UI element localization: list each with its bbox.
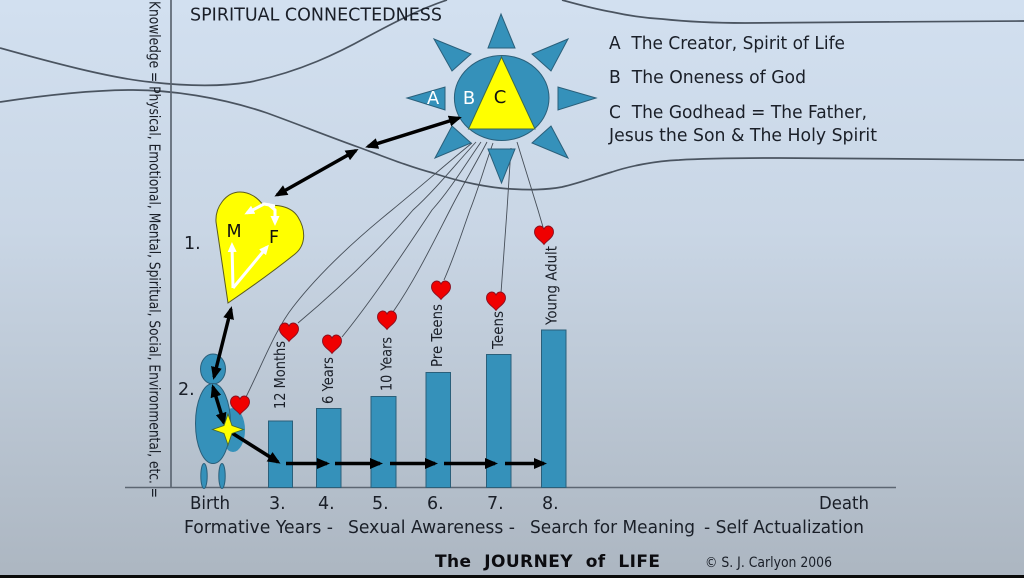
sun circle (B: oneness of god)	[454, 56, 549, 140]
bar labels: 10 Years	[378, 337, 396, 391]
timeline labels	[190, 494, 869, 514]
legend: A B C: Jesus the Son & The Holy Spirit	[608, 125, 877, 146]
icon: yellow star	[212, 414, 244, 445]
bar labels: Teens	[489, 311, 507, 350]
bar labels	[271, 246, 560, 409]
timeline labels: 6.	[427, 494, 444, 514]
sun rays (A: the creator)	[407, 14, 596, 183]
red hearts	[230, 226, 554, 414]
legend: A B C: B The Oneness of God	[609, 67, 806, 88]
bar labels: Pre Teens	[428, 304, 446, 367]
timeline labels: 5.	[372, 494, 389, 514]
yellow heart	[216, 192, 304, 303]
bar labels: 12 Months	[271, 341, 289, 409]
lines from sun to hearts	[246, 142, 543, 397]
timeline labels: 8.	[542, 494, 559, 514]
human figure	[196, 354, 245, 488]
timeline labels: 7.	[487, 494, 504, 514]
letters A B C: B	[463, 88, 475, 109]
godhead triangle (C)	[468, 57, 535, 129]
timeline labels: 3.	[269, 494, 286, 514]
bars: life stages	[268, 330, 566, 488]
bar labels: Young Adult	[542, 246, 560, 326]
title: The JOURNEY of LIFE	[435, 552, 660, 572]
black arrows	[213, 118, 544, 464]
timeline labels: Death	[819, 494, 869, 514]
life phases row: - Self Actualization	[704, 518, 864, 538]
letters A B C: C	[494, 87, 506, 108]
sun: the creator, oneness and godhead	[407, 14, 596, 183]
timeline labels: Birth	[190, 494, 230, 514]
axes	[125, 0, 896, 488]
life phases row: Search for Meaning	[530, 518, 695, 538]
number 1: 1.	[184, 234, 201, 254]
number 2: 2.	[178, 380, 195, 400]
legend: A B C: A The Creator, Spirit of Life	[609, 33, 845, 54]
copyright: © S. J. Carlyon 2006	[705, 555, 832, 571]
bar labels: 6 Years	[319, 357, 337, 404]
connectedness boundary curves	[0, 0, 1024, 190]
legend: A B C	[608, 33, 877, 146]
letters A B C	[427, 87, 506, 109]
letters M and F: M	[226, 222, 242, 242]
white arrows inside heart	[232, 204, 275, 288]
legend: A B C: C The Godhead = The Father,	[609, 102, 867, 123]
timeline labels: 4.	[318, 494, 335, 514]
life phases row: Sexual Awareness -	[348, 518, 515, 538]
life phases row	[184, 518, 864, 538]
letters A B C: A	[427, 88, 440, 109]
yellow heart: F	[269, 228, 279, 248]
life phases row: Formative Years -	[184, 518, 333, 538]
heading: spiritual connectedness: SPIRITUAL CONNECTEDNESS	[190, 6, 442, 26]
